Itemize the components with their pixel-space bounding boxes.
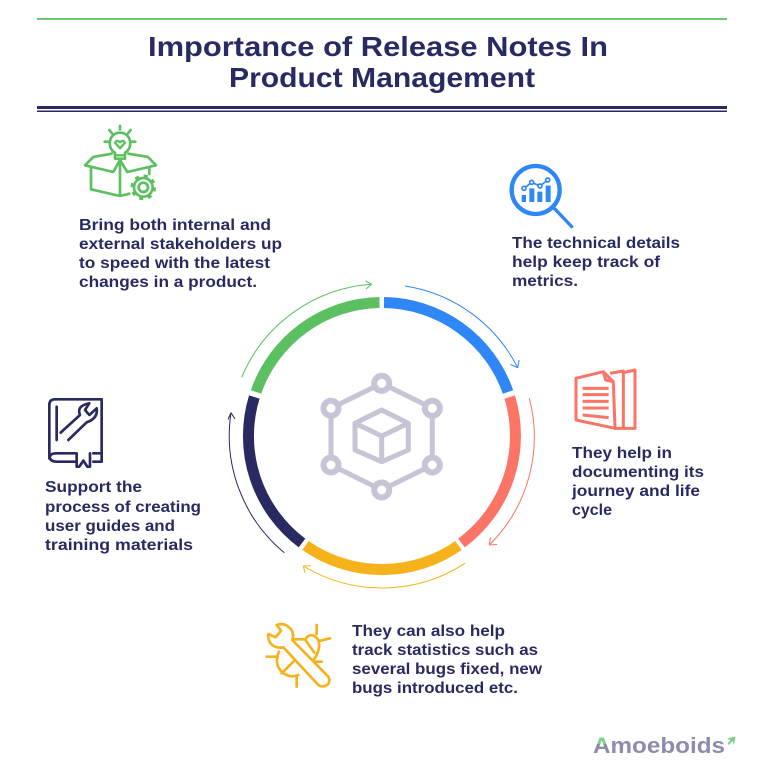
text: user guides: training materials xyxy=(45,537,193,554)
text: documentation: documenting its xyxy=(572,464,704,481)
logo: Amoeboids: Amoeboids xyxy=(593,733,725,758)
text: stakeholders: to speed with the latest xyxy=(79,255,271,272)
ring segment: blue xyxy=(384,302,508,392)
title: Importance of Release Notes In xyxy=(148,31,608,62)
panel: stakeholders xyxy=(79,126,282,291)
arrow: coral xyxy=(489,398,534,545)
text: user guides: process of creating xyxy=(45,499,201,516)
text: stakeholders: external stakeholders up xyxy=(79,236,282,253)
text: user guides xyxy=(45,479,201,554)
text: documentation: journey and life xyxy=(571,483,700,500)
text: metrics: metrics. xyxy=(512,273,578,290)
panel: user guides xyxy=(45,399,201,554)
text: stakeholders: changes in a product. xyxy=(79,274,257,291)
ring segment: navy xyxy=(248,397,302,543)
text: bug statistics: They can also help xyxy=(352,623,505,640)
text: metrics xyxy=(512,235,680,290)
icon: logo arrow xyxy=(727,736,736,745)
ring diagram xyxy=(228,281,534,588)
title: Product Management xyxy=(229,62,535,93)
icon: stacked documents xyxy=(576,370,635,428)
text: stakeholders: Bring both internal and xyxy=(79,217,271,234)
arrow: green xyxy=(242,281,372,377)
icon: bug and wrench xyxy=(267,624,330,687)
text: documentation xyxy=(571,445,704,519)
ring segment: green xyxy=(256,302,380,392)
top green rule xyxy=(37,18,727,20)
arrow: blue xyxy=(405,286,519,368)
title xyxy=(148,31,608,93)
icon: manual with wrench xyxy=(49,399,102,467)
arrow: yellow xyxy=(303,563,465,588)
panel: documentation xyxy=(571,370,704,519)
panel: bug statistics xyxy=(267,623,543,697)
panel: metrics xyxy=(512,166,680,290)
text: user guides: Support the xyxy=(45,479,142,496)
ring segment: yellow xyxy=(306,546,458,570)
text: metrics: The technical details xyxy=(512,235,680,252)
text: bug statistics: track statistics such as xyxy=(352,642,538,659)
text: metrics: help keep track of xyxy=(512,254,661,271)
ring segment: coral xyxy=(462,397,515,543)
text: documentation: cycle xyxy=(572,502,612,519)
text: bug statistics: bugs introduced etc. xyxy=(352,680,518,697)
title double rule xyxy=(37,106,727,112)
text: user guides: user guides and xyxy=(45,518,175,535)
icon: central hexagon network with cube xyxy=(324,376,440,498)
icon: magnifying glass with chart xyxy=(512,166,572,227)
text: bug statistics xyxy=(352,623,543,697)
text: stakeholders xyxy=(79,217,282,291)
arrow: navy xyxy=(228,413,284,553)
icon: box with light bulb and gear xyxy=(85,126,156,199)
text: documentation: They help in xyxy=(572,445,672,462)
text: bug statistics: several bugs fixed, new xyxy=(352,661,543,678)
